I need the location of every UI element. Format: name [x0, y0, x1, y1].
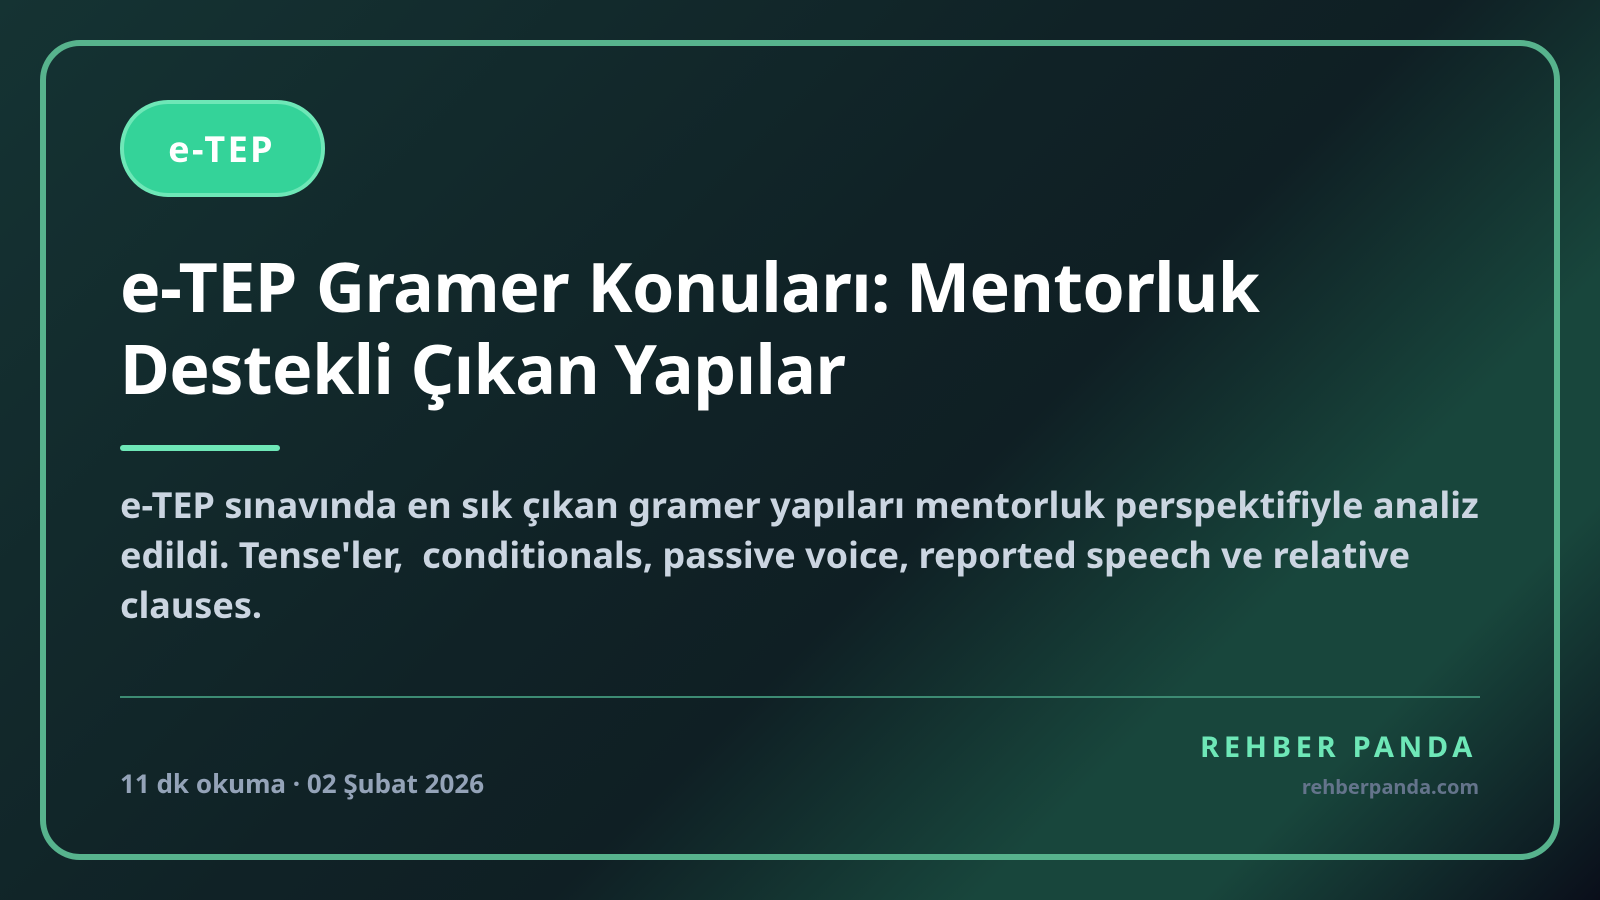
reading time and date: 11 dk okuma · 02 Şubat 2026 — [120, 765, 484, 801]
brand website: rehberpanda.com — [1302, 773, 1479, 800]
title: Destekli Çıkan Yapılar — [120, 321, 845, 414]
accent bar — [120, 445, 280, 451]
footer divider — [120, 696, 1480, 698]
description text: e-TEP sınavında en sık çıkan gramer yapıları mentorluk perspektifiyle analiz edildi. Tense'ler, conditionals, passive voice, reported speech ve relative clauses. — [120, 480, 1479, 629]
title — [120, 239, 1260, 414]
badge: e-TEP: e-TEP — [168, 124, 275, 173]
brand name: REHBER PANDA — [1200, 727, 1477, 766]
badge: e-TEP — [120, 100, 325, 197]
title: e-TEP Gramer Konuları: Mentorluk — [120, 239, 1259, 332]
